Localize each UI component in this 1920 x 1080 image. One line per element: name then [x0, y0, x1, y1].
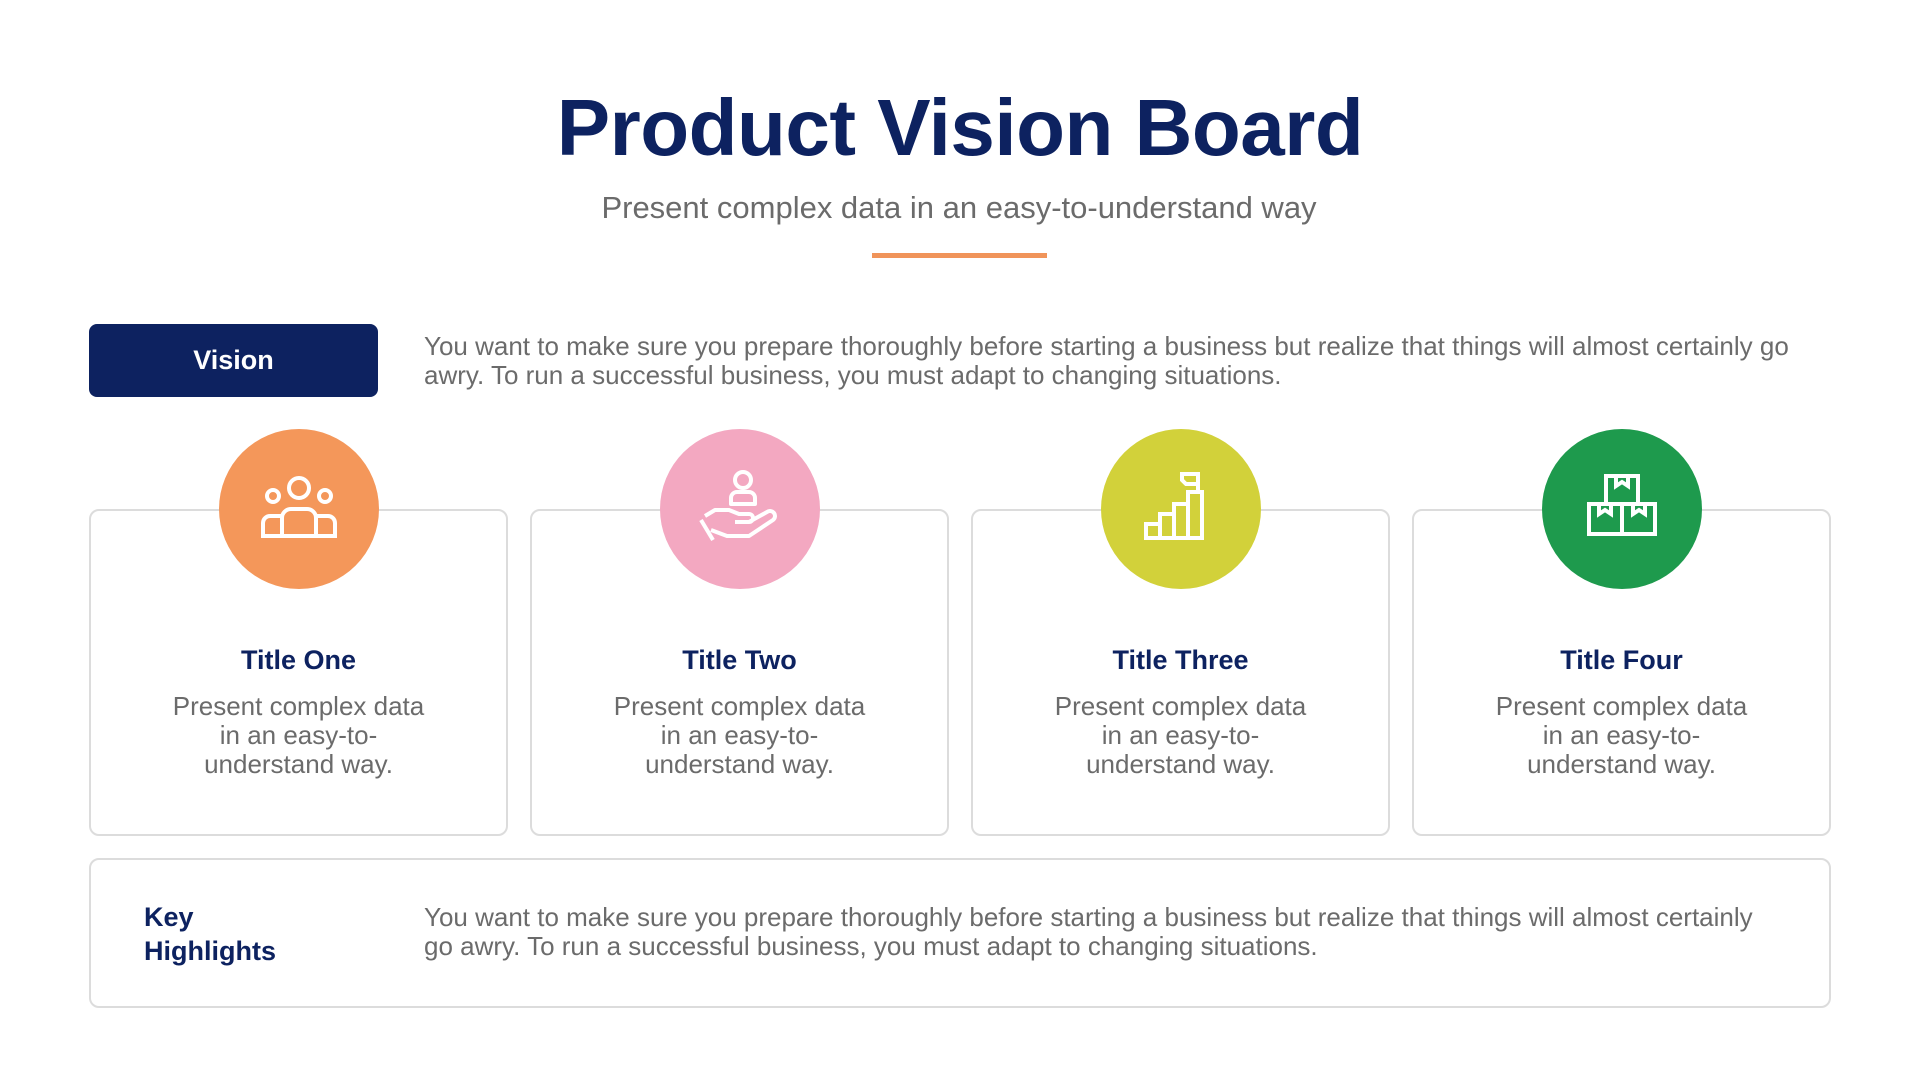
- key highlights heading: [144, 902, 276, 966]
- title one: Title One: [241, 645, 356, 675]
- key highlights heading: Highlights: [144, 936, 276, 966]
- vision label: [89, 324, 378, 397]
- key highlights text: [424, 902, 1753, 961]
- desc two: understand way.: [645, 749, 834, 779]
- panel: key highlights: [89, 858, 1831, 1008]
- desc one: understand way.: [204, 749, 393, 779]
- title three: Title Three: [1112, 645, 1249, 675]
- icon: growth steps: [1101, 429, 1261, 589]
- key highlights text: You want to make sure you prepare thoroughly before starting a business but realize that things will almost certainly: [424, 902, 1753, 932]
- icon: people: [219, 429, 379, 589]
- desc three: Present complex data: [1055, 691, 1306, 721]
- desc two: in an easy-to-: [661, 720, 818, 750]
- desc three: [1055, 691, 1306, 779]
- desc two: [614, 691, 866, 779]
- desc one: [173, 691, 424, 779]
- desc three: in an easy-to-: [1102, 720, 1259, 750]
- card one: [89, 509, 508, 836]
- desc four: in an easy-to-: [1543, 720, 1700, 750]
- vision text: You want to make sure you prepare thoroughly before starting a business but realize that things will almost certainly go: [424, 331, 1789, 361]
- vision label: Vision: [193, 345, 274, 375]
- desc one: Present complex data: [173, 691, 424, 721]
- desc one: in an easy-to-: [220, 720, 377, 750]
- card four: [1412, 509, 1831, 836]
- icon: boxes: [1542, 429, 1702, 589]
- key highlights text: go awry. To run a successful business, you must adapt to changing situations.: [424, 931, 1318, 961]
- title two: Title Two: [682, 645, 797, 675]
- desc three: understand way.: [1086, 749, 1275, 779]
- title four: Title Four: [1560, 645, 1683, 675]
- subtitle: Present complex data in an easy-to-understand way: [601, 190, 1317, 225]
- vision text: awry. To run a successful business, you must adapt to changing situations.: [424, 360, 1282, 390]
- title: Product Vision Board: [557, 83, 1363, 172]
- desc two: Present complex data: [614, 691, 865, 721]
- desc four: Present complex data: [1496, 691, 1747, 721]
- key highlights heading: Key: [144, 902, 194, 932]
- desc four: [1496, 691, 1748, 779]
- vision text: [424, 331, 1789, 390]
- desc four: understand way.: [1527, 749, 1716, 779]
- card two: [530, 509, 949, 836]
- card three: [971, 509, 1390, 836]
- icon: hand: [660, 429, 820, 589]
- accent line: [872, 253, 1047, 258]
